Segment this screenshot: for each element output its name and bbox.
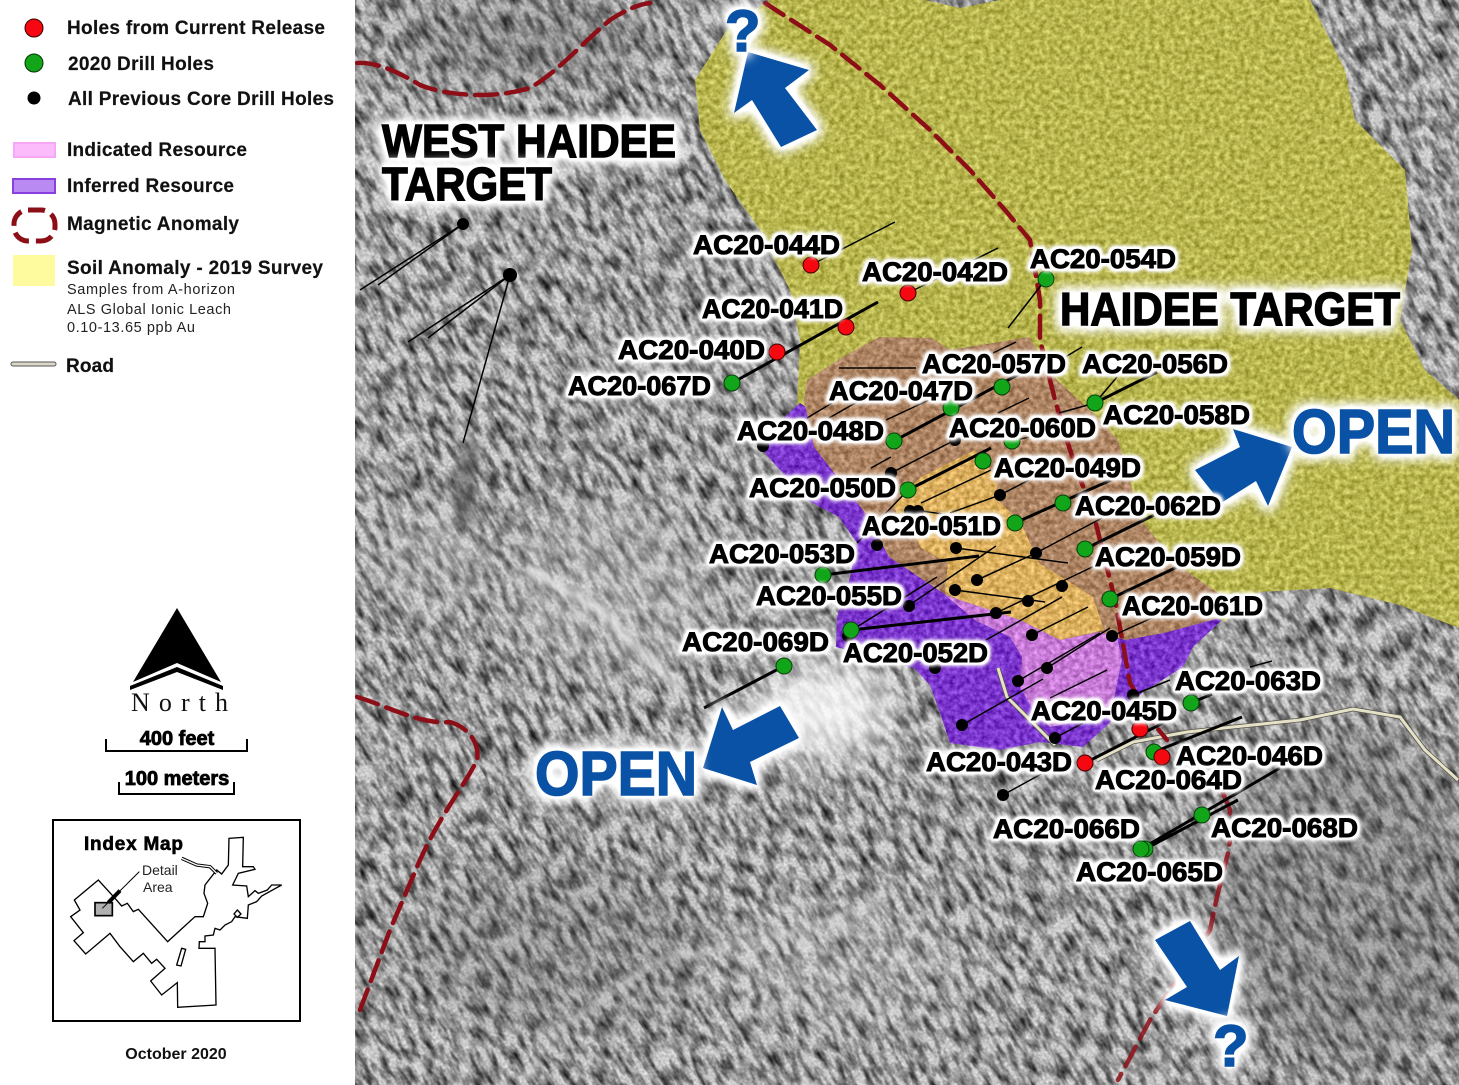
drill hole label: AC20-064D <box>1095 765 1242 795</box>
drill hole label: AC20-055D <box>756 581 902 611</box>
soil anomaly area <box>695 0 1459 628</box>
drill hole label: AC20-067D <box>568 371 711 401</box>
drill hole label: AC20-058D <box>1103 400 1250 430</box>
drill hole label: AC20-061D <box>1122 591 1263 621</box>
scale bar: feet <box>106 728 247 751</box>
drill hole label: AC20-040D <box>618 335 765 365</box>
text: question mark south: ? <box>1213 1014 1248 1079</box>
drill hole label: AC20-056D <box>1082 349 1228 379</box>
legend item: road <box>11 356 114 377</box>
drill hole label: AC20-043D <box>926 747 1072 777</box>
date: October 2020 <box>125 1046 227 1063</box>
indicated resource area (pink) <box>945 595 1122 727</box>
legend item: inferred resource: Inferred Resource <box>67 176 234 197</box>
index map: Area <box>143 879 173 895</box>
roads <box>998 668 1458 780</box>
heading: Haidee Target: HAIDEE TARGET <box>1060 283 1400 335</box>
legend item: soil anomaly <box>13 255 323 336</box>
index map <box>53 820 300 1021</box>
drill hole label: AC20-042D <box>862 257 1008 287</box>
north arrow <box>130 608 228 717</box>
scale bar: feet: 400 feet <box>140 728 215 750</box>
drill traces, thick <box>704 302 1280 849</box>
panel: legend sidebar <box>0 0 355 1085</box>
legend item: road: Road <box>66 356 114 377</box>
arrow: open to south-west <box>703 706 799 785</box>
legend item: soil anomaly: Samples from A-horizon <box>67 282 235 298</box>
drill hole label: AC20-049D <box>994 453 1141 483</box>
arrow: open to east <box>1195 429 1292 506</box>
text: question mark north: ? <box>725 0 760 64</box>
heading: West Haidee Target <box>382 115 676 210</box>
previous core drill holes <box>457 218 1139 801</box>
inferred resource area <box>757 403 1222 750</box>
drill hole label: AC20-066D <box>993 814 1140 844</box>
2020 drill holes <box>724 271 1210 857</box>
drill hole label: AC20-065D <box>1076 857 1223 887</box>
holes from current release <box>769 257 1170 771</box>
legend item: magnetic anomaly <box>14 210 239 241</box>
drill hole label: AC20-068D <box>1211 813 1358 843</box>
scale bar: meters: 100 meters <box>125 768 229 790</box>
drill hole label: AC20-052D <box>843 638 988 668</box>
legend item: soil anomaly: ALS Global Ionic Leach <box>67 302 231 318</box>
index map: Index Map <box>84 834 183 855</box>
drill hole label: AC20-041D <box>702 294 843 324</box>
heading: West Haidee Target: TARGET <box>382 158 552 210</box>
index map: Detail <box>142 862 178 878</box>
legend item: current release holes: Holes from Current Release <box>67 18 325 39</box>
text: OPEN west: OPEN <box>535 740 697 809</box>
magnetic anomaly outlines <box>357 3 1230 1080</box>
legend item: magnetic anomaly: Magnetic Anomaly <box>67 214 239 235</box>
drill hole label: AC20-047D <box>829 376 973 406</box>
legend item: 2020 drill holes: 2020 Drill Holes <box>68 54 214 75</box>
drill hole label: AC20-054D <box>1030 244 1176 274</box>
drill hole label: AC20-062D <box>1075 491 1221 521</box>
drill hole label: AC20-046D <box>1176 741 1323 771</box>
drill hole label: AC20-060D <box>949 413 1096 443</box>
drill traces, thin <box>360 222 1272 795</box>
legend item: soil anomaly: 0.10-13.65 ppb Au <box>67 320 195 336</box>
drill hole label: AC20-069D <box>682 627 829 657</box>
legend item: indicated resource: Indicated Resource <box>67 140 247 161</box>
drill hole label: AC20-051D <box>862 511 1001 541</box>
indicated overlap (orange) <box>893 450 1104 640</box>
drill hole label: AC20-044D <box>693 230 840 260</box>
north arrow: North <box>131 688 228 717</box>
drill hole label: AC20-059D <box>1095 542 1241 572</box>
soil and resource overlap (brown) <box>804 337 1223 640</box>
arrow: open to south-east <box>1155 921 1239 1016</box>
drill hole label: AC20-050D <box>749 473 896 503</box>
drill hole label: AC20-057D <box>922 349 1066 379</box>
legend <box>11 18 334 377</box>
arrow: open to north-west <box>734 52 817 147</box>
drill hole label: AC20-048D <box>737 416 884 446</box>
drill hole label: AC20-063D <box>1175 666 1321 696</box>
legend item: previous core holes: All Previous Core Drill Holes <box>68 89 334 110</box>
panel: aerial photo map <box>355 0 1459 1085</box>
heading: West Haidee Target: WEST HAIDEE <box>382 115 676 167</box>
drill hole label: AC20-045D <box>1031 696 1177 726</box>
drill hole label: AC20-053D <box>709 539 855 569</box>
legend item: soil anomaly: Soil Anomaly - 2019 Survey <box>67 258 323 279</box>
